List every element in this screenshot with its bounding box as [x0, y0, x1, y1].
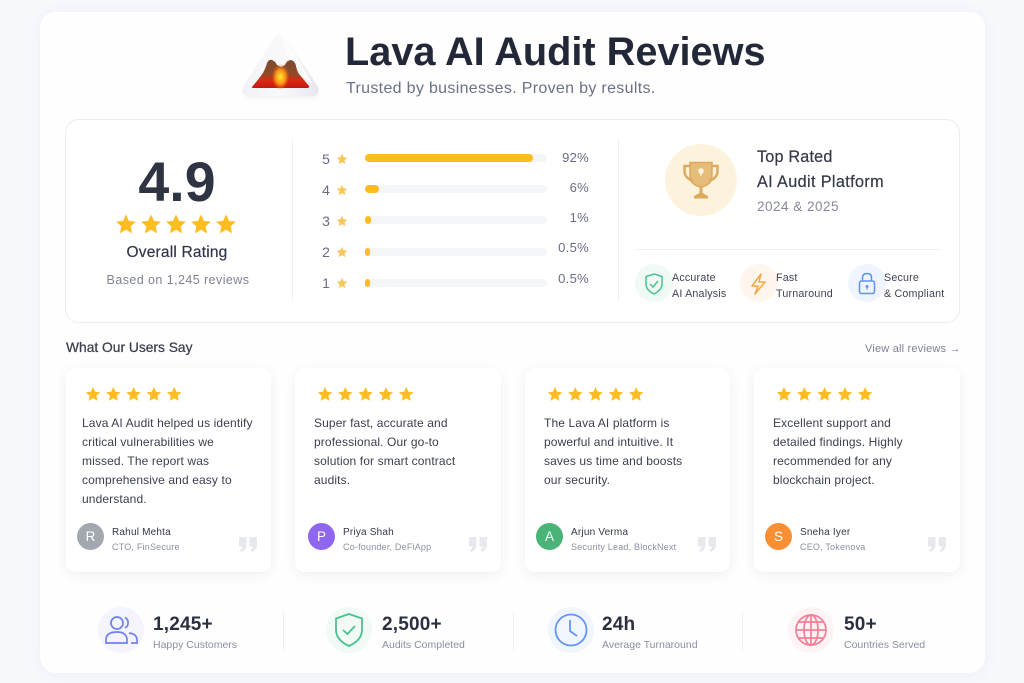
review card: Priya Shah: audits. [314, 473, 350, 487]
icon: lava logo [242, 48, 319, 98]
row: 3 stars [322, 210, 589, 229]
review card: Sneha Iyer: CEO, Tokenova [800, 542, 865, 552]
review card: Arjun Verma: powerful and intuitive. It [544, 435, 673, 449]
row: 2 stars: 0.5% [558, 240, 589, 255]
row: 1 star: 0.5% [558, 271, 589, 286]
review count: Based on 1,245 reviews [107, 273, 249, 287]
stat: happy customers: 1,245+ [153, 614, 213, 635]
badge: accurate analysis: AI Analysis [672, 288, 726, 300]
award text: 2024 & 2025 [757, 199, 839, 214]
award text: AI Audit Platform [757, 173, 884, 191]
badge: fast turnaround: Fast [776, 272, 798, 284]
badge: accurate analysis [635, 264, 726, 302]
review card: Arjun Verma: saves us time and boosts [544, 454, 682, 468]
title: Lava AI Audit Reviews [345, 30, 766, 74]
row: 4 stars [322, 180, 589, 198]
overall score: 4.9 [138, 151, 216, 213]
review card: Sneha Iyer: detailed findings. Highly [773, 435, 903, 449]
review card: Rahul Mehta: comprehensive and easy to [82, 473, 232, 487]
row: 2 stars: 2 [322, 244, 330, 260]
review card: Sneha Iyer [754, 368, 960, 572]
review card: Arjun Verma: Security Lead, BlockNext [571, 542, 676, 552]
stat: happy customers [98, 607, 237, 653]
badge: fast turnaround: Turnaround [776, 288, 833, 300]
badge: secure and compliant [848, 264, 944, 302]
review card: Rahul Mehta: missed. The report was [82, 454, 209, 468]
review card: Arjun Verma: The Lava AI platform is [544, 416, 670, 430]
review card: Arjun Verma: our security. [544, 473, 610, 487]
review card: Priya Shah: Super fast, accurate and [314, 416, 448, 430]
review card: Rahul Mehta: critical vulnerabilities we [82, 435, 214, 449]
badge: accurate analysis: Accurate [672, 272, 716, 284]
review card: Sneha Iyer: Excellent support and [773, 416, 891, 430]
award text [756, 148, 884, 214]
badge: secure and compliant: Secure [884, 272, 919, 284]
icon: trophy [665, 144, 737, 216]
review card: Sneha Iyer: S [774, 529, 783, 544]
review card: Rahul Mehta: R [86, 529, 95, 544]
row: 5 stars: 5 [322, 151, 330, 167]
review card: Sneha Iyer: blockchain project. [773, 473, 875, 487]
overall rating label: Overall Rating [126, 244, 228, 261]
row: 3 stars: 3 [322, 213, 330, 229]
row: 1 star [322, 271, 589, 291]
row: 5 stars [322, 150, 589, 167]
stat: audits completed [326, 607, 465, 653]
review card: Priya Shah: solution for smart contract [314, 454, 455, 468]
row: 2 stars [322, 240, 589, 260]
review card: Sneha Iyer: Sneha Iyer [800, 527, 850, 538]
stat: average turnaround [548, 607, 698, 653]
review card: Rahul Mehta: Rahul Mehta [112, 527, 171, 538]
review card: Arjun Verma [525, 368, 730, 572]
review card: Priya Shah [295, 368, 501, 572]
review card: Sneha Iyer: recommended for any [773, 454, 892, 468]
overall stars [116, 214, 236, 234]
badge: secure and compliant: & Compliant [884, 288, 944, 300]
review card: Priya Shah: Co-founder, DeFiApp [343, 542, 431, 552]
badge: fast turnaround [740, 264, 833, 302]
stat: countries served [788, 607, 925, 653]
review card: Priya Shah: professional. Our go-to [314, 435, 439, 449]
stat: audits completed: 2,500+ [382, 614, 442, 635]
subtitle: Trusted by businesses. Proven by results. [346, 80, 656, 97]
stat: countries served: Countries Served [844, 639, 925, 651]
panel: rating summary [65, 119, 960, 323]
rating bars [322, 150, 589, 291]
row: 5 stars: 92% [562, 150, 589, 165]
stat: audits completed: Audits Completed [382, 639, 465, 651]
stat: average turnaround: 24h [602, 614, 635, 635]
review card: Arjun Verma: Arjun Verma [571, 527, 628, 538]
review card: Arjun Verma: A [545, 529, 554, 544]
row: 4 stars: 6% [570, 180, 589, 195]
review card: Rahul Mehta: Lava AI Audit helped us identify [82, 416, 253, 430]
row: 3 stars: 1% [570, 210, 589, 225]
award text: Top Rated [757, 148, 833, 166]
review card: Priya Shah: Priya Shah [343, 527, 394, 538]
view all link: View all reviews → [865, 343, 961, 355]
review card: Priya Shah: P [317, 529, 326, 544]
section heading: What Our Users Say [66, 340, 193, 355]
review card: Rahul Mehta: CTO, FinSecure [112, 542, 180, 552]
row: 1 star: 1 [322, 275, 330, 291]
review card: Rahul Mehta [66, 368, 271, 572]
stat: happy customers: Happy Customers [153, 639, 237, 651]
row: 4 stars: 4 [322, 182, 330, 198]
stat: average turnaround: Average Turnaround [602, 639, 698, 651]
review card: Rahul Mehta: understand. [82, 492, 147, 506]
stat: countries served: 50+ [844, 614, 877, 635]
